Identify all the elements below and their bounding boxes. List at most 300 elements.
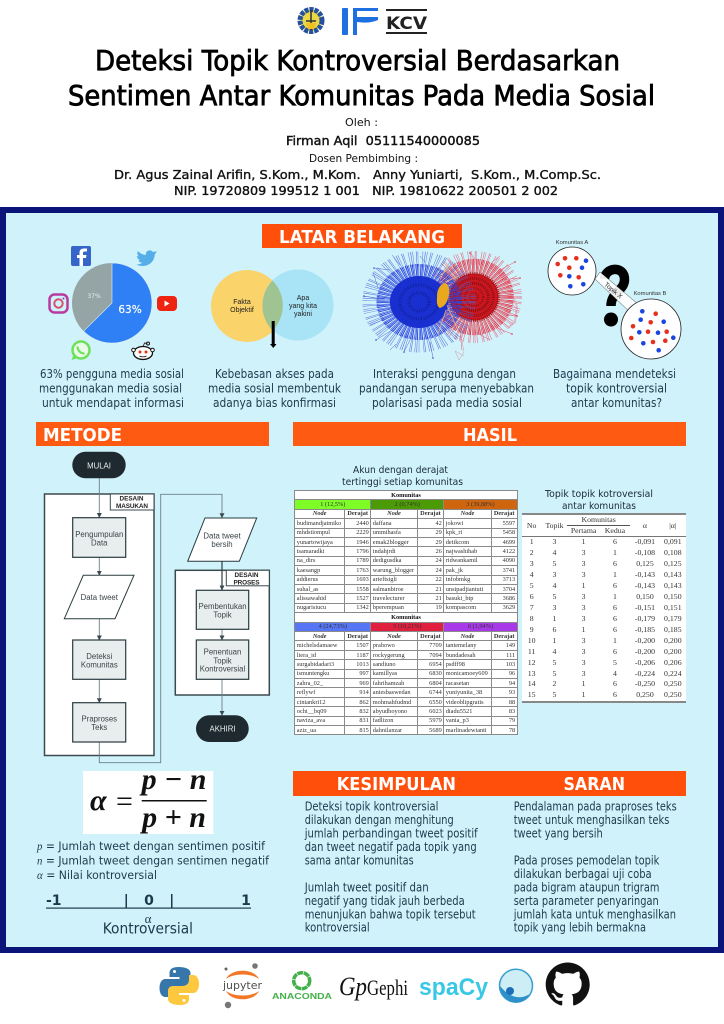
heading: kesimpulan and saran (293, 771, 686, 796)
table: top communities 4-6: aziz_ua (297, 727, 316, 734)
table: controversial topics: Komunitas (582, 515, 616, 524)
table: top communities 1-3: 1 (12,5%) (320, 501, 345, 508)
table: top communities 4-6: ochi__bq09 (297, 708, 327, 715)
text: saran: serta parameter penyaringan (514, 894, 659, 908)
table: controversial topics: 5 (613, 658, 617, 667)
step: praproses teks: Teks (91, 723, 107, 732)
input: data tweet bersih: bersih (211, 540, 233, 549)
step: pembentukan topik (196, 590, 249, 629)
tools logo row (160, 963, 590, 1008)
table: top communities 1-3: 5458 (503, 529, 515, 536)
table: controversial topics: 1 (613, 636, 617, 645)
authors and supervisors: Dr. Agus Zainal Arifin, S.Kom., M.Kom. Anny Yuniarti, S.Kom., M.Comp.Sc. (114, 168, 601, 182)
table: top communities 4-6: 914 (359, 689, 369, 696)
diagram: confirmation bias venn: yang kita (289, 303, 317, 310)
table: top communities 4-6: naviza_ava (297, 717, 325, 724)
chart: social media pie (50, 246, 177, 360)
formula legend: p = Jumlah tweet dengan sentimen positif (36, 839, 266, 853)
table: controversial topics: 7 (530, 603, 534, 612)
table: top communities 1-3: 2229 (356, 529, 369, 536)
table: top communities 4-6: Derajat (347, 633, 368, 640)
table: top communities 4-6: 1507 (356, 642, 369, 649)
table: controversial topics: 1 (582, 690, 586, 699)
diagram: communities and topic x (548, 240, 681, 359)
input: data tweet (64, 575, 134, 619)
table: controversial topics (522, 513, 686, 703)
table: controversial topics: 0,250 (664, 690, 682, 699)
table: controversial topics: 9 (530, 625, 534, 634)
table: controversial topics: 0,206 (664, 658, 682, 667)
table: top communities 4-6: 103 (506, 661, 515, 668)
step: pembentukan topik: Topik (213, 610, 232, 619)
table: top communities 1-3: 21 (435, 586, 442, 593)
table: top communities 4-6: racasetan (446, 680, 469, 687)
table: top communities 1-3: mhdstiompul (297, 529, 330, 536)
table: controversial topics: -0,206 (635, 658, 655, 667)
table: controversial topics: Pertama (571, 526, 596, 535)
table: controversial topics: 6 (613, 603, 617, 612)
table: top communities 1-3: kaesangp (297, 567, 320, 574)
table: controversial topics: 3 (582, 647, 586, 656)
table: top communities 4-6: ismuntengku (297, 670, 329, 677)
text: kesimpulan: sama antar komunitas (305, 854, 414, 868)
table: controversial topics: 1 (613, 592, 617, 601)
table: top communities 4-6: tantemelany (446, 642, 477, 649)
table: top communities 4-6: Node (313, 633, 326, 640)
caption: communities: Bagaimana mendeteksi (553, 367, 676, 381)
table: top communities 4-6: yuniyunita_38 (446, 689, 482, 696)
table: controversial topics: 0,143 (664, 581, 682, 590)
heading: hasil: HASIL (463, 425, 517, 446)
formula legend: n = Jumlah tweet dengan sentimen negatif (37, 854, 270, 868)
icon: gephi (339, 972, 408, 1001)
icon: IF logo (342, 8, 378, 35)
table: controversial topics: 2 (553, 679, 556, 688)
text: saran: tweet yang bersih (514, 827, 603, 841)
table: top communities 1-3: 42 (435, 520, 442, 527)
caption: communities: antar komunitas? (571, 396, 662, 410)
table: top communities 4-6: 79 (509, 717, 515, 724)
formula legend (36, 839, 270, 882)
table: top communities 4-6: reflywf (297, 689, 315, 696)
icon: anaconda: ANACONDA (272, 991, 332, 1001)
table: controversial topics: 1 (582, 581, 586, 590)
diagram: confirmation bias venn: yakini (294, 311, 312, 318)
table: top communities 1-3: travelecturer (373, 595, 405, 602)
table: top communities 1-3: 1946 (356, 539, 369, 546)
step: deteksi komunitas (73, 640, 126, 679)
table: top communities 1-3: 1789 (356, 557, 369, 564)
table: top communities 1-3: budimandjatmiko (297, 520, 341, 527)
table: top communities 4-6: 5689 (429, 727, 442, 734)
table: top communities 1-3: infobmkg (446, 576, 470, 583)
table: top communities 4-6: 6830 (429, 670, 442, 677)
start node (72, 452, 126, 478)
table: top communities 1-3: nugarisiucu (297, 604, 326, 611)
table: top communities 4-6: Komunitas (391, 614, 421, 621)
table: top communities 1-3: 29 (435, 529, 442, 536)
controversy scale: -1 (46, 893, 62, 909)
table: top communities 1-3: arieftsigli (373, 576, 397, 583)
icon: ITS logo (300, 10, 322, 32)
table: controversial topics: 1 (582, 679, 586, 688)
chart: polarized network graph (363, 252, 521, 360)
table: top communities 4-6: 1187 (356, 652, 369, 659)
panel: desain masukan: DESAIN (120, 496, 144, 502)
text: saran: tweet untuk menghasilkan teks (514, 813, 669, 827)
step: praproses teks (73, 703, 126, 742)
table: top communities 4-6: 5 (10,21%) (393, 623, 421, 630)
table: top communities 1-3: 29 (435, 539, 442, 546)
step: pengumpulan data: Data (91, 538, 108, 548)
table: controversial topics: 1 (582, 625, 586, 634)
table: controversial topics: 3 (582, 559, 586, 568)
table: top communities 4-6: 7709 (429, 642, 442, 649)
table: controversial topics: 0,143 (664, 570, 682, 579)
heading: hasil (293, 422, 686, 446)
text: kesimpulan: dilakukan dengan menghitung (305, 813, 454, 827)
table: top communities 1-3: Komunitas (391, 492, 421, 499)
table: top communities 4-6: Derajat (420, 633, 441, 640)
table: controversial topics: 4 (553, 548, 556, 557)
logo group: ITS, IF, KCV (300, 8, 428, 35)
caption: venn: Kebebasan akses pada (215, 367, 334, 381)
table: top communities 4-6: 815 (359, 727, 369, 734)
table: top communities 1-3: alissawahid (297, 595, 326, 602)
table: top communities 1-3: 24 (435, 567, 442, 574)
table: controversial topics: Kedua (605, 526, 625, 535)
table: controversial topics: Topik (545, 521, 564, 530)
table: top communities 1-3: 3741 (503, 567, 515, 574)
text: kesimpulan: Deteksi topik kontroversial (305, 800, 438, 814)
table: top communities 1-3: na_dirs (297, 557, 315, 564)
table: controversial topics: -0,143 (635, 570, 655, 579)
table: top communities 4-6: 997 (359, 670, 369, 677)
table: controversial topics: 6 (613, 537, 617, 546)
table: top communities 1-3: pak_jk (446, 567, 463, 574)
table: top communities 1-3 (294, 490, 518, 613)
text: saran: topik yang lebih bermakna (514, 921, 646, 935)
table: controversial topics: 3 (530, 559, 534, 568)
input: data tweet: Data tweet (81, 593, 119, 602)
table: controversial topics: 5 (553, 559, 556, 568)
table: top communities 1-3: 4122 (503, 548, 515, 555)
caption: communities: topik kontroversial (566, 382, 667, 396)
text: saran: dilakukan berbagai uji coba (514, 867, 652, 881)
table: controversial topics: 6 (553, 625, 556, 634)
table: top communities 4-6: bundadesah (446, 652, 476, 659)
table: controversial topics: 3 (582, 636, 586, 645)
table: controversial topics: 0,125 (636, 559, 654, 568)
text: saran: Pada proses pemodelan topik (514, 854, 659, 868)
table: controversial topics: 1 (553, 636, 556, 645)
panel: desain masukan (44, 494, 154, 756)
table: controversial topics: 3 (582, 658, 586, 667)
heading: kesimpulan and saran: KESIMPULAN (337, 774, 456, 795)
icon: whatsapp (72, 342, 90, 360)
table: top communities 1-3: dedigusdka (373, 557, 401, 564)
diagram: confirmation bias venn: Fakta (233, 299, 251, 306)
table: top communities 4-6: liera_id (297, 652, 316, 659)
step: pengumpulan data (73, 518, 126, 557)
table: top communities 4-6: abyudhoyono (373, 708, 407, 715)
step: pembentukan topik: Pembentukan (198, 602, 247, 611)
table: controversial topics: 0,150 (664, 592, 682, 601)
table: controversial topics: 1 (530, 537, 534, 546)
table: top communities 1-3: jokowi (446, 520, 463, 527)
caption: pie (39, 367, 184, 410)
text: kesimpulan: Jumlah tweet positif dan (304, 880, 429, 894)
title: Deteksi Topik Kontroversial Berdasarkan (95, 44, 620, 77)
chart: social media pie: 37% (87, 293, 101, 300)
icon: python (160, 967, 199, 1005)
table: top communities 1-3: kpk_ri (446, 529, 462, 536)
table: top communities 4-6: rockygerung (373, 652, 405, 659)
table: top communities 1-3: detikcom (446, 539, 469, 546)
table title: akun: tertinggi setiap komunitas (342, 477, 463, 488)
table: controversial topics: 3 (582, 570, 586, 579)
table: top communities 1-3: addierus (297, 576, 318, 583)
table: top communities 1-3: Derajat (347, 510, 368, 517)
step: penentuan topik kontroversial: Topik (213, 657, 232, 666)
table: top communities 4-6: 96 (509, 670, 515, 677)
formula: = (116, 785, 133, 818)
table: controversial topics: 6 (613, 625, 617, 634)
table: controversial topics: 4 (553, 581, 556, 590)
table: top communities 1-3: Node (387, 510, 401, 517)
table: controversial topics: 1 (582, 537, 586, 546)
table: controversial topics: 3 (582, 614, 586, 623)
community B: Komunitas B (634, 291, 667, 297)
caption: venn: media sosial membentuk (208, 382, 341, 396)
table: controversial topics: -0,224 (635, 668, 655, 678)
table: top communities 4-6: monicamoey609 (446, 670, 488, 677)
table: top communities 4-6: Node (387, 633, 401, 640)
table: controversial topics: 11 (528, 647, 535, 656)
table: controversial topics: 3 (582, 592, 586, 601)
table: top communities 1-3: suhal_as (297, 586, 318, 593)
table: top communities 4-6: 7094 (429, 652, 442, 659)
step: penentuan topik kontroversial (196, 640, 249, 679)
table: top communities 1-3: unsipadjiantuti (446, 586, 483, 593)
step: penentuan topik kontroversial: Penentuan (204, 648, 241, 657)
authors and supervisors: NIP. 19720809 199512 1 001 NIP. 19810622 200501 2 002 (174, 184, 558, 198)
table: controversial topics: -0,179 (635, 614, 655, 623)
formula: α (90, 784, 107, 817)
table: controversial topics: 5 (553, 668, 556, 678)
table: controversial topics: 15 (528, 690, 536, 699)
heading: metode (36, 422, 269, 446)
table: controversial topics: |α| (669, 521, 676, 530)
caption: network: pandangan serupa menyebabkan (359, 382, 534, 396)
table: top communities 4-6: psdff98 (446, 661, 465, 668)
diagram: confirmation bias venn (211, 270, 334, 348)
controversy scale: Kontroversial (103, 920, 193, 938)
text: kesimpulan: negatif yang tidak jauh berbeda (305, 894, 465, 908)
formula: p + n (139, 801, 206, 834)
table: controversial topics: 6 (613, 647, 617, 656)
chart: social media pie: 63% (118, 304, 142, 316)
table: controversial topics: 0,150 (636, 592, 654, 601)
table: top communities 4-6: dahnilanzar (373, 727, 402, 734)
end node (196, 715, 249, 742)
controversy scale: α (145, 911, 152, 926)
table: controversial topics: 12 (528, 658, 536, 667)
diagram: communities and topic x: Topik X (603, 281, 624, 301)
table: controversial topics: 10 (528, 636, 536, 645)
icon: anaconda (272, 973, 332, 1001)
table: top communities 1-3: ridwankamil (446, 557, 478, 564)
table: controversial topics: 5 (553, 658, 556, 667)
text: kesimpulan: jumlah perbandingan tweet positif (304, 827, 478, 841)
end node: AKHIRI (210, 725, 236, 734)
table: controversial topics: 8 (530, 614, 534, 623)
table title: topik: Topik topik kotroversial (544, 489, 653, 500)
title: Sentimen Antar Komunitas Pada Media Sosial (68, 79, 655, 112)
panel: desain proses (175, 570, 269, 695)
table: top communities 4-6: Node (461, 633, 474, 640)
table: controversial topics: 3 (553, 603, 556, 612)
icon: gephi: Gp (339, 972, 367, 1001)
table: controversial topics: 4 (553, 647, 556, 656)
table title: akun: Akun dengan derajat (353, 465, 448, 476)
table: top communities 4-6: mohmahfudmd (373, 698, 411, 706)
flowchart (44, 452, 269, 763)
table: controversial topics: 0,179 (664, 614, 682, 623)
table: top communities 1-3: emak2blogger (373, 539, 409, 546)
table: top communities 4-6: 94 (509, 680, 515, 687)
arrow (270, 321, 276, 348)
caption: network: polarisasi pada media sosial (372, 396, 522, 410)
table: top communities 4-6: 5979 (429, 717, 442, 724)
table: top communities 1-3: 1693 (356, 576, 369, 583)
step: penentuan topik kontroversial: Kontroversial (200, 665, 246, 674)
table: controversial topics: 4 (530, 570, 534, 579)
table: controversial topics: 6 (613, 679, 617, 688)
table: controversial topics: 0,250 (636, 690, 654, 699)
caption: communities (553, 367, 676, 410)
table: controversial topics: 0,185 (664, 625, 682, 634)
table: top communities 1-3: 3629 (503, 604, 515, 611)
table: controversial topics: 14 (528, 679, 536, 688)
formula (83, 763, 213, 834)
caption: pie: untuk mendapat informasi (42, 396, 184, 410)
table: controversial topics: No (527, 521, 536, 530)
table: top communities 4-6: 4 (24,73%) (319, 623, 347, 630)
text: saran: jumlah kata untuk menghasilkan (513, 907, 676, 921)
table: top communities 1-3: Node (313, 510, 326, 517)
table: top communities 4-6: cintankri12 (297, 698, 325, 706)
table: controversial topics: -0,200 (635, 636, 655, 645)
heading: metode: METODE (43, 425, 122, 446)
caption: venn (208, 367, 341, 410)
table: controversial topics: 3 (553, 537, 556, 546)
icon: KCV logo: KCV (386, 14, 428, 34)
table: controversial topics: 0,224 (664, 668, 682, 678)
icon: facebook (71, 246, 91, 266)
table: top communities 4-6: prabowo (373, 642, 395, 649)
table: controversial topics: 1 (613, 570, 617, 579)
table: controversial topics: -0,151 (635, 603, 655, 612)
authors and supervisors: Oleh : (345, 116, 378, 129)
table: top communities 1-3: 3 (39,88%) (466, 501, 495, 508)
table: controversial topics: 0,091 (664, 537, 682, 546)
heading: kesimpulan and saran: SARAN (564, 774, 625, 795)
table: top communities 1-3: 2 (0,74%) (395, 501, 420, 508)
table: top communities 4-6: 88 (509, 698, 515, 706)
table: top communities 4-6: 6023 (429, 708, 442, 715)
icon: instagram (50, 294, 68, 312)
table: top communities 4-6: fahrihamzah (373, 680, 404, 687)
panel: desain masukan: MASUKAN (116, 503, 148, 510)
caption: venn: adanya bias konfirmasi (213, 396, 336, 410)
table: controversial topics: 1 (553, 614, 556, 623)
table: controversial topics: 6 (613, 614, 617, 623)
icon: spacy: spaCy (419, 974, 489, 1001)
table: top communities 4-6: michelsdamaew (297, 642, 337, 649)
icon: twitter (136, 250, 157, 266)
table: top communities 1-3: basuki_btp (446, 595, 473, 602)
table: top communities 1-3: 24 (435, 557, 442, 564)
text: kesimpulan (304, 800, 478, 935)
table: controversial topics: 5 (553, 690, 556, 699)
table: top communities 4-6: 832 (359, 708, 369, 715)
table: top communities 4-6: 6 (1,94%) (468, 623, 493, 630)
table: controversial topics: 1 (613, 548, 617, 557)
formula: p − n (139, 763, 206, 796)
table: controversial topics: 0,250 (664, 679, 682, 688)
controversy scale: 1 (241, 893, 251, 909)
community A: Komunitas A (556, 240, 588, 246)
table: top communities 4-6: 6954 (429, 661, 442, 668)
table: top communities 4-6: 93 (509, 689, 515, 696)
table: top communities 1-3: 1527 (356, 595, 369, 602)
table: top communities 1-3: daffana (373, 520, 392, 527)
table: top communities 4-6: 83 (509, 708, 515, 715)
controversy scale (46, 893, 251, 938)
table: top communities 1-3: indahjrdi (373, 548, 396, 555)
table: top communities 1-3: 3704 (503, 586, 515, 593)
authors and supervisors: Dosen Pembimbing : (309, 152, 418, 165)
table: top communities 4-6: 6744 (429, 689, 442, 696)
table: top communities 4-6: 1013 (356, 661, 369, 668)
icon: jupyter (222, 963, 263, 1008)
diagram: confirmation bias venn: Apa (297, 295, 309, 302)
text: kesimpulan: dan tweet negatif pada topik yang (305, 840, 477, 854)
input: data tweet bersih (188, 518, 257, 561)
table: top communities 4-6: 969 (359, 680, 369, 687)
caption: pie: 63% pengguna media sosial (40, 367, 184, 381)
text: saran (513, 800, 677, 935)
controversy scale: 0 (144, 893, 154, 909)
table: top communities 1-3: 19 (435, 604, 442, 611)
table: top communities 1-3: 1763 (356, 567, 369, 574)
table: top communities 4-6: diadu5521 (446, 708, 472, 715)
table: controversial topics: -0,185 (635, 625, 655, 634)
table: controversial topics: 3 (582, 668, 586, 678)
icon: gephi: Gephi (367, 975, 408, 1000)
table: controversial topics: 0,200 (664, 636, 682, 645)
main panel background (3, 210, 721, 950)
table: controversial topics: 6 (530, 592, 534, 601)
connectors (99, 478, 222, 763)
table title: topik: antar komunitas (562, 501, 636, 512)
table: top communities 1-3: 5597 (503, 520, 515, 527)
diagram: confirmation bias venn: Objektif (230, 307, 254, 314)
table: controversial topics: α (643, 521, 647, 530)
table: controversial topics: 0,200 (664, 647, 682, 656)
input: data tweet bersih: Data tweet (203, 531, 241, 540)
